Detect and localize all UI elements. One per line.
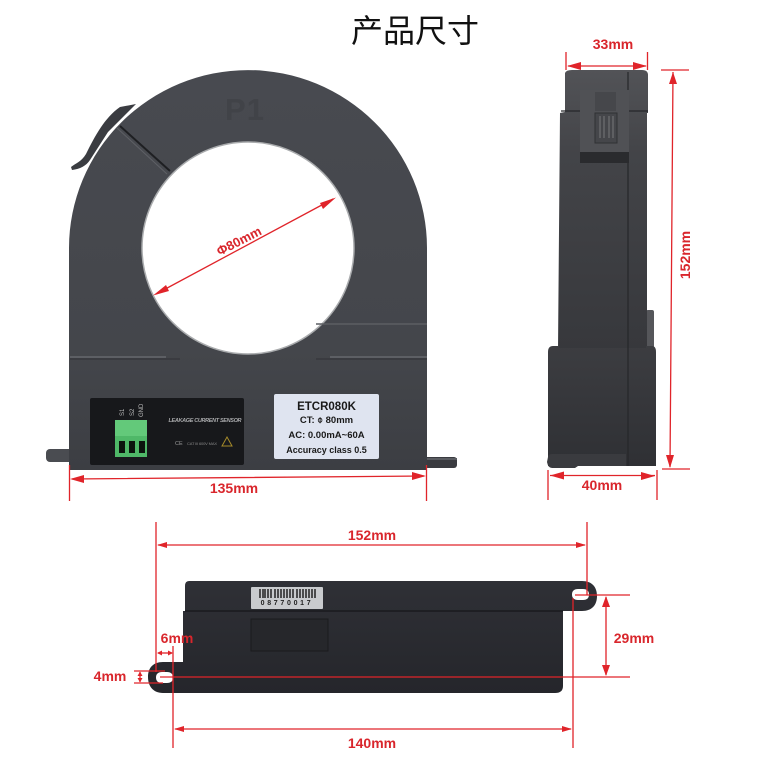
title: 产品尺寸 [351, 13, 479, 49]
product label: Accuracy class 0.5 [286, 445, 367, 455]
sensor body with round hole [69, 70, 427, 470]
dimension: 152mm overall [156, 522, 587, 672]
dimension: 152mm overall: 152mm [348, 527, 396, 543]
panel: bottom view [148, 581, 597, 693]
dimension: 29mm [160, 595, 654, 677]
black terminal panel: S1 [120, 408, 126, 416]
dimension: slot spacing 140mm [173, 598, 573, 751]
dimension: slot 6mm: 6mm [161, 630, 193, 646]
dimension: height 152mm: 152mm [677, 231, 693, 279]
panel: front view of sensor [46, 70, 457, 470]
product label: ETCR080K [297, 401, 357, 413]
black terminal panel: GND [139, 403, 145, 417]
recessed rectangle [251, 619, 328, 651]
product label: CT: ⌽ 80mm [300, 415, 353, 426]
black terminal panel: LEAKAGE CURRENT SENSOR [168, 418, 242, 424]
dimension: thickness 33mm [566, 36, 648, 70]
barcode sticker [251, 587, 323, 609]
dimension: slot 4mm: 4mm [94, 668, 126, 684]
hole rim [142, 142, 354, 354]
dimension: depth 40mm: 40mm [582, 477, 622, 493]
dimension: height 152mm [661, 70, 693, 469]
black terminal panel: CAT III 600V MAX [187, 441, 217, 446]
side nub [646, 310, 654, 348]
black terminal panel [90, 398, 244, 465]
upper side body [558, 70, 648, 350]
dimension: slot 4mm [94, 668, 165, 684]
dimension: thickness 33mm: 33mm [593, 36, 633, 52]
bottom foot [547, 454, 626, 468]
dimension: slot 6mm [157, 630, 193, 656]
dimension: width 135mm: 135mm [210, 480, 258, 496]
seam lines [561, 72, 648, 466]
dimension: slot spacing 140mm: 140mm [348, 735, 396, 751]
moulded P1 mark: P1 [225, 92, 265, 127]
dimension: width 135mm [70, 465, 426, 501]
product label [274, 394, 379, 459]
product label: AC: 0.00mA~60A [288, 430, 365, 441]
latch [71, 104, 136, 170]
left and right mounting tabs [46, 449, 457, 468]
clip [580, 90, 629, 163]
split seams [70, 126, 427, 359]
dimension: inner diameter 80mm [153, 198, 336, 296]
dimension: 29mm: 29mm [614, 630, 654, 646]
dimension: inner diameter 80mm: Φ80mm [214, 223, 264, 259]
barcode sticker: 08770017 [261, 600, 313, 607]
panel: side view [547, 70, 656, 468]
black terminal panel: CE [175, 441, 183, 447]
base outline with mounting slots [148, 581, 597, 693]
black terminal panel: S2 [130, 408, 136, 416]
lower base [548, 346, 656, 466]
dimension: depth 40mm [548, 470, 657, 500]
green connector [115, 420, 147, 457]
